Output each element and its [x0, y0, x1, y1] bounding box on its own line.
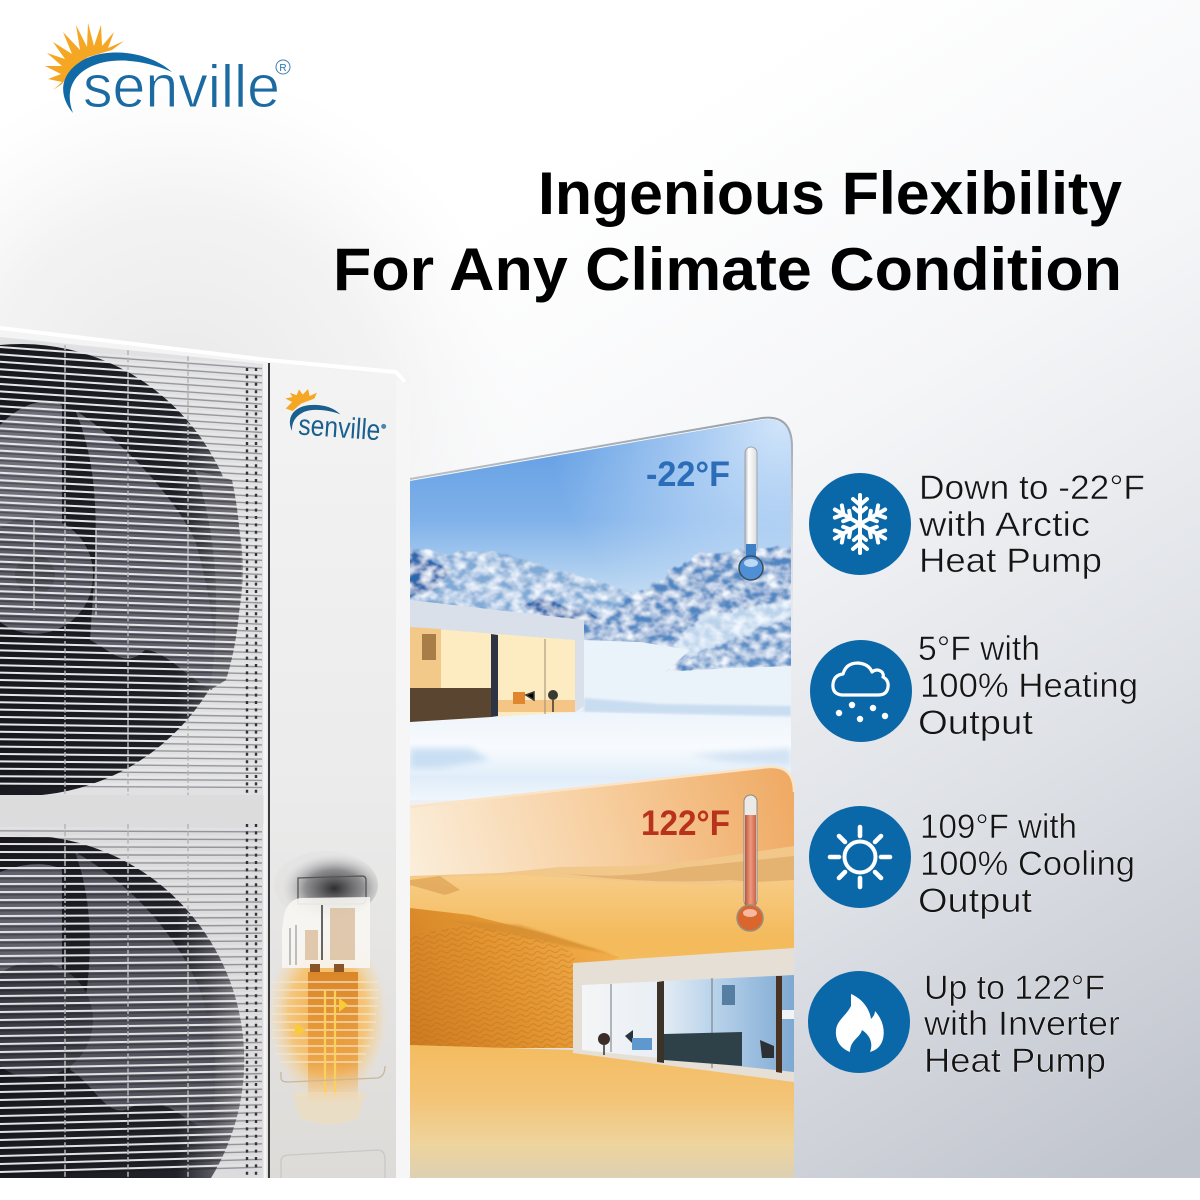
feature text: with Inverter [923, 1005, 1120, 1043]
panel frame [410, 418, 792, 640]
snow ground [584, 640, 791, 718]
title [333, 160, 1123, 303]
logo wordmark: senville [83, 53, 280, 120]
panel edge highlight [410, 767, 794, 807]
panel between grilles [0, 795, 264, 824]
logo on unit: senville [297, 410, 381, 447]
icon: snow cloud [810, 640, 912, 742]
upper grille with fan [0, 337, 263, 796]
house in desert [573, 948, 794, 1082]
feature: 109°F cooling [809, 806, 1135, 920]
foreground sand [410, 1045, 794, 1178]
cutaway compressor [268, 851, 388, 1124]
feature text: with Arctic [918, 506, 1090, 544]
panel: hot climate scene [410, 767, 794, 1178]
registered mark [276, 60, 290, 74]
icon: sun [809, 806, 911, 908]
logo on unit [282, 388, 388, 448]
house in snow [410, 600, 584, 722]
feature text [918, 630, 1138, 742]
icon: logo sun [45, 23, 124, 90]
lower access panel [281, 1150, 385, 1178]
logo swoosh [63, 53, 172, 113]
unit body [0, 328, 410, 1178]
feature: up to 122°F [808, 969, 1120, 1080]
feature text: 5°F with [918, 630, 1040, 668]
feature text: Heat Pump [924, 1042, 1106, 1080]
title: For Any Climate Condition [333, 236, 1122, 303]
right side strip [396, 380, 410, 1178]
lower grille with fan [0, 824, 263, 1178]
feature text: 100% Cooling [920, 845, 1135, 883]
registered mark: R [279, 63, 287, 74]
brand logo [45, 23, 290, 120]
top edge highlight [0, 328, 405, 382]
title: Ingenious Flexibility [538, 160, 1123, 227]
snowy mountains [405, 546, 796, 670]
feature text: Output [918, 704, 1034, 742]
feature text [923, 969, 1120, 1080]
panel: cold climate scene [405, 415, 796, 800]
sand dunes [410, 846, 794, 1048]
temperature label: 122°F: 122°F [641, 804, 730, 843]
feature text: Heat Pump [919, 542, 1102, 580]
sky [410, 415, 791, 605]
feature text [918, 469, 1145, 580]
feature: down to -22°F [809, 469, 1145, 580]
thermometer: cold [739, 447, 763, 580]
feature text: Down to -22°F [919, 469, 1145, 507]
feature text: 109°F with [920, 808, 1077, 846]
outdoor unit [0, 328, 410, 1178]
icon: flame [808, 971, 910, 1073]
panel seam [264, 362, 266, 1178]
feature text: 100% Heating [920, 667, 1138, 705]
feature text [918, 808, 1135, 920]
feature text: Output [918, 882, 1033, 920]
temperature label: -22°F: -22°F [646, 455, 730, 494]
feature text: Up to 122°F [924, 969, 1105, 1007]
feature: 5°F heating [810, 630, 1138, 742]
desert sky [410, 768, 794, 876]
icon: snowflake [809, 473, 911, 575]
thermometer: hot [737, 795, 763, 931]
